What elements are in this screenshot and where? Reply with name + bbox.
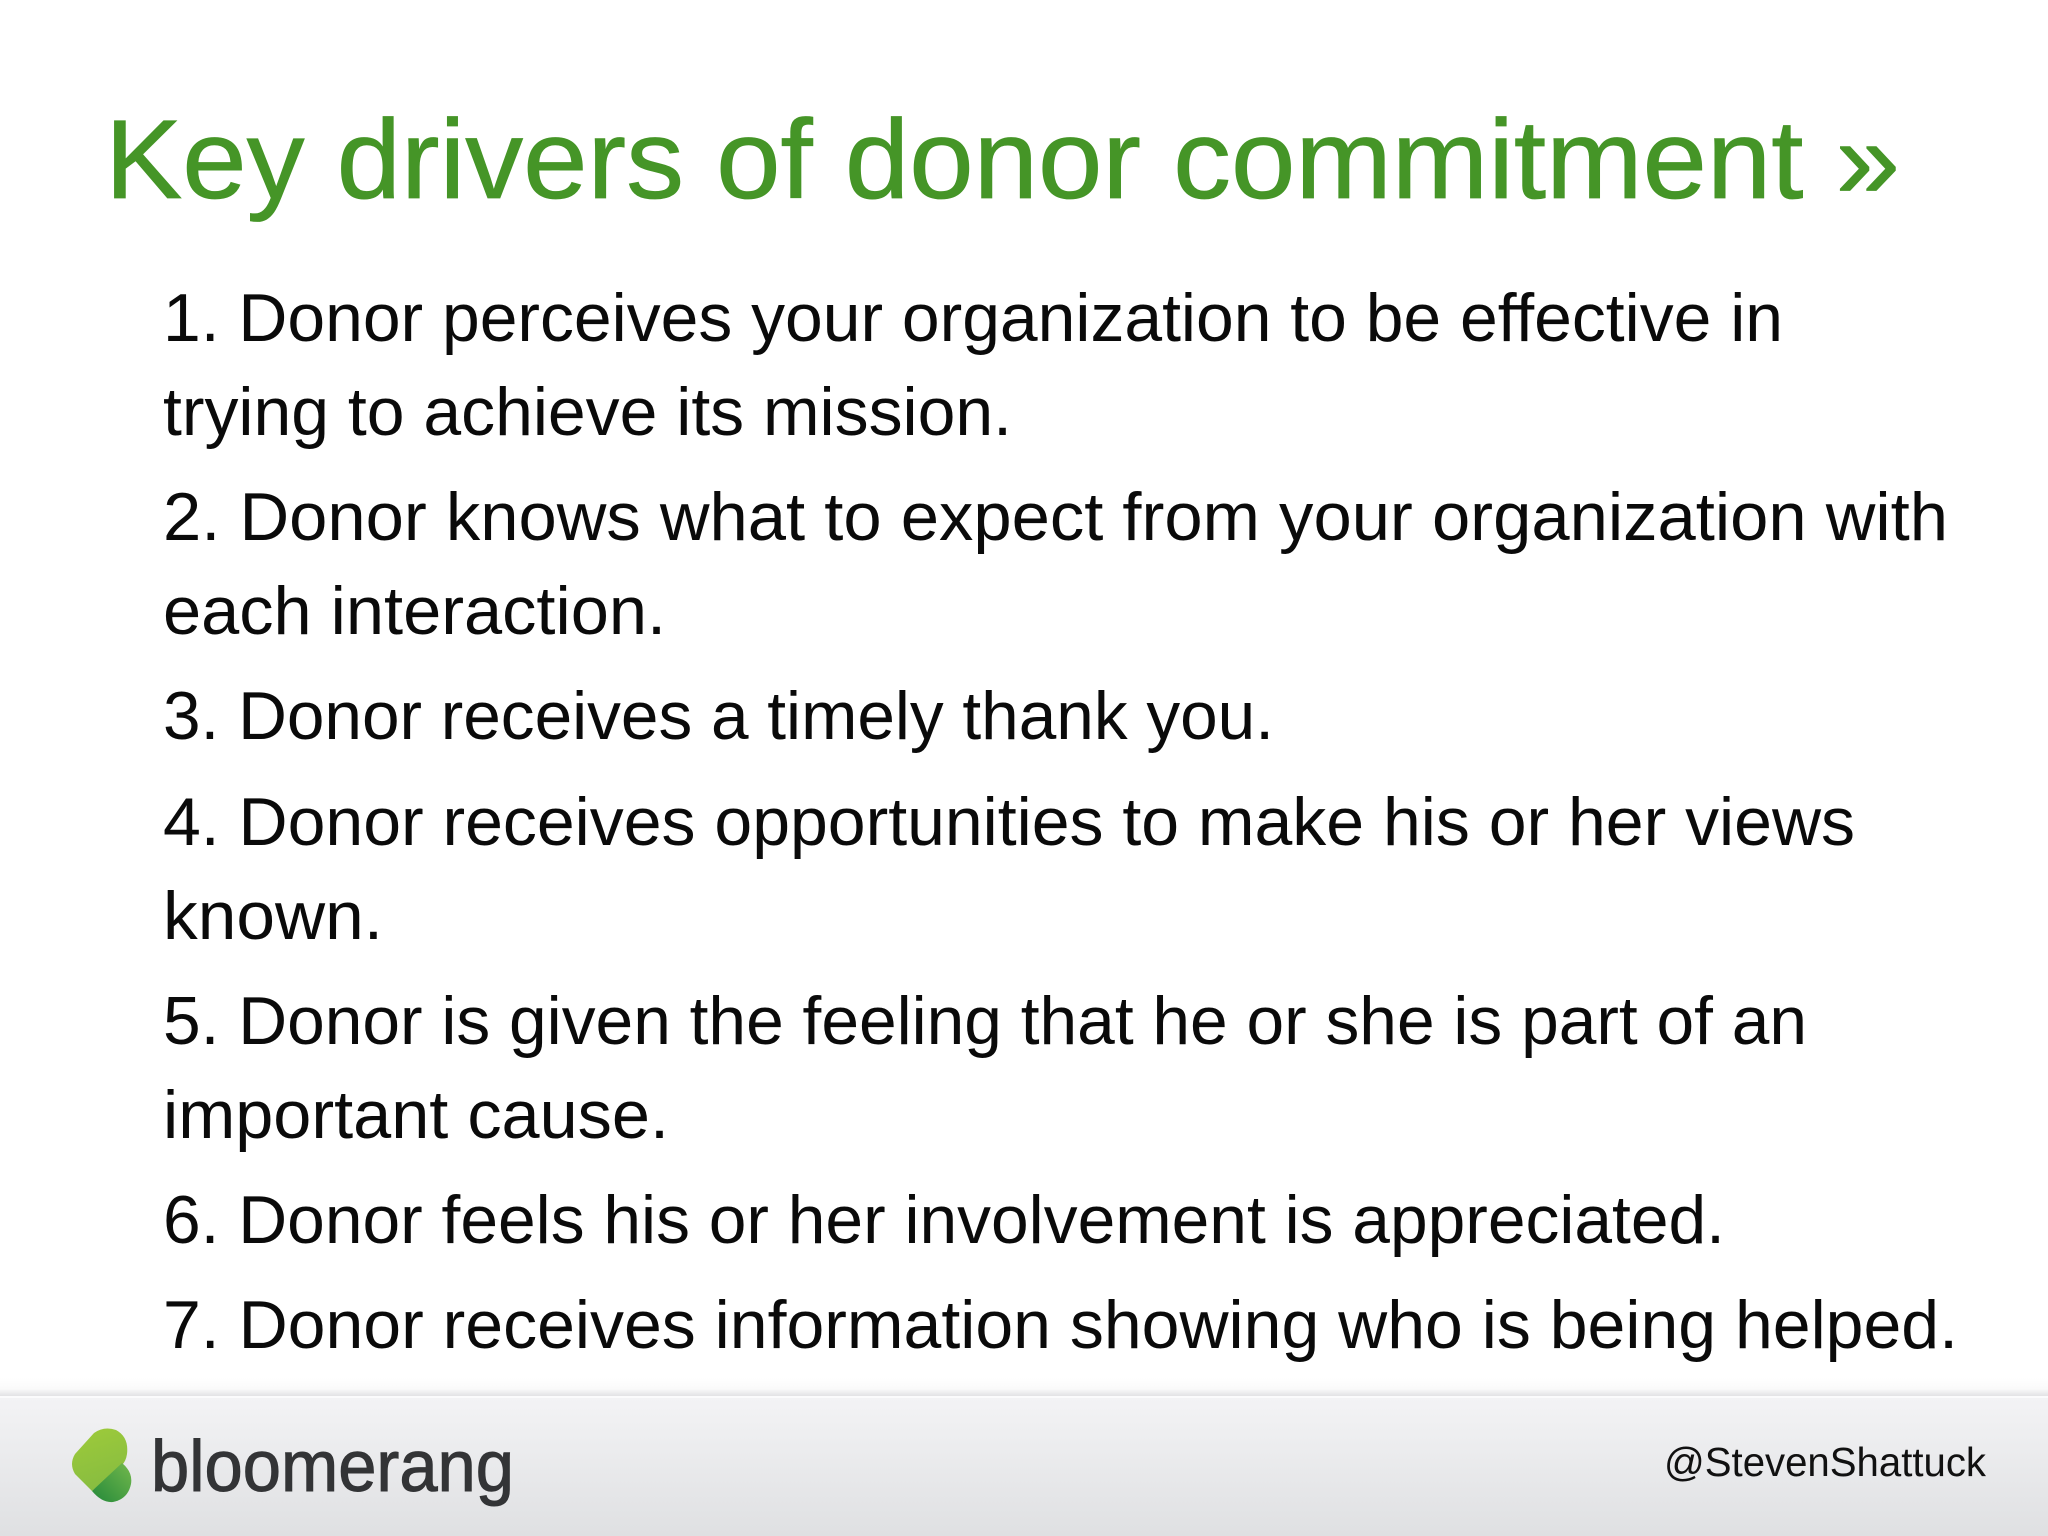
item 4: 4. Donor receives opportunities to make his or her views (163, 784, 1855, 860)
numbered list of donor commitment drivers (163, 280, 1958, 1363)
item 5: important cause. (163, 1077, 669, 1153)
item 6: 6. Donor feels his or her involvement is appreciated. (163, 1182, 1725, 1258)
item 5 (163, 983, 1807, 1153)
item 2: 2. Donor knows what to expect from your organization with (163, 479, 1948, 555)
item 3: 3. Donor receives a timely thank you. (163, 678, 1274, 754)
item 5: 5. Donor is given the feeling that he or she is part of an (163, 983, 1807, 1059)
footer bar (0, 1378, 2048, 1536)
item 1 (163, 280, 1783, 450)
item 2 (163, 479, 1948, 649)
item 1: 1. Donor perceives your organization to be effective in (163, 280, 1783, 356)
item 4 (163, 784, 1855, 954)
item 4: known. (163, 878, 383, 954)
icon: bloomerang logo mark (72, 1429, 131, 1502)
title: Key drivers of donor commitment » (105, 97, 1900, 222)
bloomerang wordmark: bloomerang (151, 1427, 514, 1507)
item 7: 7. Donor receives information showing who is being helped. (163, 1287, 1958, 1363)
item 2: each interaction. (163, 573, 666, 649)
twitter handle: @StevenShattuck (1664, 1439, 1986, 1485)
item 1: trying to achieve its mission. (163, 374, 1012, 450)
